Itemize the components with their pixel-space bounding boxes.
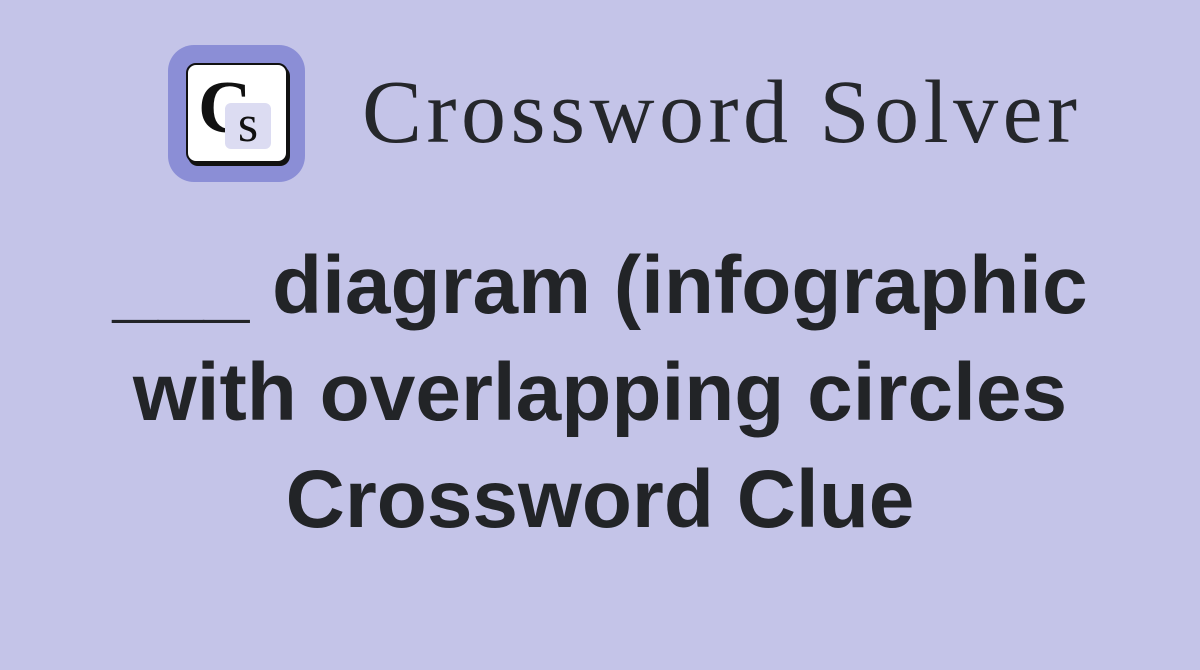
logo <box>168 45 305 182</box>
title: with overlapping circles <box>133 347 1067 438</box>
title: ___ diagram (infographic <box>112 240 1088 331</box>
logo: C <box>198 67 251 149</box>
logo: s <box>238 96 258 153</box>
title: Crossword Clue <box>286 454 914 545</box>
brand name: Crossword Solver <box>362 63 1082 162</box>
title <box>112 240 1088 545</box>
